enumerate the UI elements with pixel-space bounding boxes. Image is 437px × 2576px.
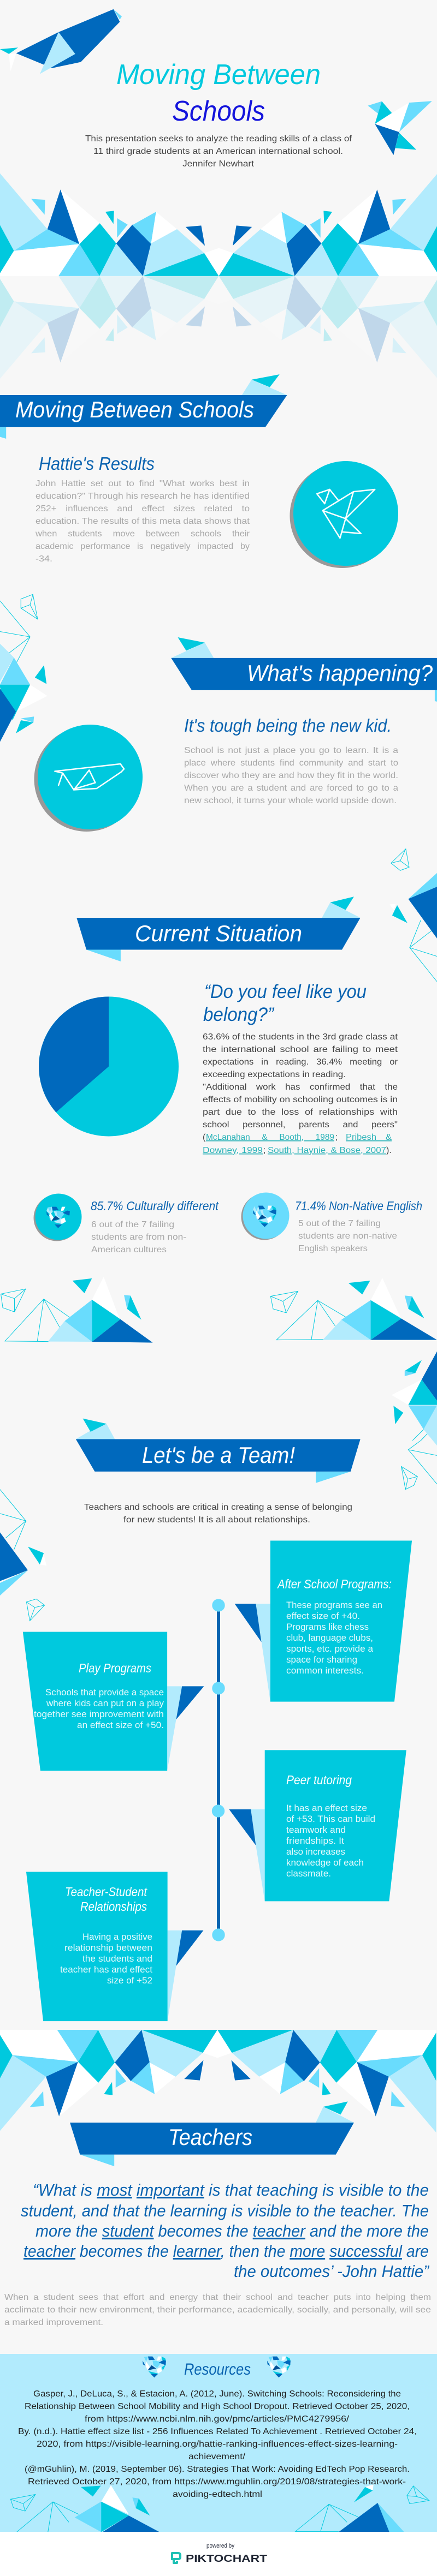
references list: 2020, from https://visible-learning.org/hattie-ranking-influences-effect-sizes-learning- <box>37 2440 398 2449</box>
banner: Current Situation: Current Situation <box>135 921 302 946</box>
title <box>116 59 321 127</box>
references list: Retrieved October 27, 2020, from https://www.mguhlin.org/2019/08/strategies-that-work- <box>28 2477 406 2487</box>
card: Peer tutoring: also increases <box>286 1847 345 1857</box>
card: After School Programs: sports, etc. provide a <box>286 1644 374 1654</box>
banner: What's happening?: What's happening? <box>247 660 433 686</box>
quote: John Hattie: the outcomes’ -John Hattie” <box>234 2262 430 2281</box>
crystal band with reflection <box>0 174 437 379</box>
decorative crystal right <box>389 849 437 982</box>
banner: Teachers: Teachers <box>168 2124 252 2150</box>
card: After School Programs: Programs like chess <box>286 1622 369 1632</box>
references list: (@mGuhlin), M. (2019, September 06). Strategies That Work: Avoiding EdTech Pop Research. <box>25 2465 410 2474</box>
references list: from https://www.ncbi.nlm.nih.gov/pmc/articles/PMC4279956/ <box>85 2414 350 2424</box>
stat: non-native English: 5 out of the 7 failing <box>298 1219 381 1228</box>
card: Teacher-Student Relationships: Having a positive <box>82 1932 152 1942</box>
crystal band inverted <box>0 2030 436 2132</box>
stat: culturally different <box>34 1194 219 1254</box>
card: Play Programs: where kids can put on a play <box>46 1699 164 1708</box>
card: Play Programs: Schools that provide a space <box>45 1688 164 1698</box>
card: Peer tutoring: friendships. It <box>286 1836 344 1846</box>
heading: Hattie's Results: Hattie's Results <box>39 453 155 474</box>
text block: belonging statistics: Pribesh & <box>346 1133 392 1142</box>
heading: Do you feel like you belong?: belong?” <box>203 1004 274 1025</box>
intro text: This presentation seeks to analyze the reading skills of a class of <box>85 134 352 144</box>
heading: Resources with heart icons: Resources <box>184 2360 251 2378</box>
text block: belonging statistics: effects of mobility on schooling outcomes is in <box>203 1095 398 1104</box>
heading: Do you feel like you belong? <box>203 981 367 1025</box>
stat: culturally different: 6 out of the 7 failing <box>91 1220 174 1229</box>
pie chart <box>39 996 179 1136</box>
mountains left in resources <box>10 2485 160 2532</box>
card: After School Programs: These programs see an <box>286 1600 382 1610</box>
card: Teacher-Student Relationships: the students and <box>82 1954 152 1964</box>
quote: John Hattie: teacher becomes the learner, then the more successful are <box>23 2242 429 2261</box>
banner: Let's be a Team!: Let's be a Team! <box>142 1442 295 1468</box>
stat: culturally different: students are from non- <box>91 1233 186 1242</box>
card: Play Programs: together see improvement with <box>34 1710 164 1719</box>
text block: belonging statistics: ( <box>203 1133 206 1142</box>
text block: new kid: School is not just a place you go to learn. It is a <box>184 746 398 755</box>
card: Peer tutoring: Peer tutoring <box>286 1773 352 1787</box>
text block: new kid: new school, it turns your whole world upside down. <box>184 796 397 805</box>
card: After School Programs: common interests. <box>286 1666 364 1676</box>
text block: belonging statistics: ; <box>335 1133 338 1142</box>
card: Play Programs: Play Programs <box>79 1661 151 1675</box>
decorative crystal left lower <box>0 1490 46 1621</box>
card: After School Programs: space for sharing <box>286 1655 357 1665</box>
banner: Moving Between Schools: Moving Between Schools <box>15 397 254 422</box>
heading: It's tough being the new kid: It's tough being the new kid. <box>184 715 392 736</box>
quote: John Hattie: “What is most important is that teaching is visible to the <box>33 2180 429 2200</box>
text block: Hattie's results: 252+ influences and effect sizes related to <box>36 504 250 513</box>
text block: belonging statistics: South, Haynie, & Bose, 2007 <box>268 1146 386 1155</box>
mountains right <box>270 1278 437 1340</box>
references list <box>18 2389 417 2499</box>
card: Teacher-Student Relationships: Relationships <box>80 1899 147 1914</box>
icon: paper whale in circle <box>34 725 143 832</box>
text block: relationships intro: Teachers and schools are critical in creating a sense of belonging <box>84 1503 352 1512</box>
quote: John Hattie: more the student becomes the teacher and the more the <box>36 2221 429 2240</box>
text block: new kid <box>184 746 398 805</box>
text block: marked improvement <box>4 2293 431 2327</box>
text block: Hattie's results: education. The results of this meta data shows that <box>36 517 250 526</box>
panel: resources <box>0 2354 437 2532</box>
card: Teacher-Student Relationships <box>26 1872 203 2021</box>
title: Moving Between <box>116 59 321 91</box>
text block: marked improvement: When a student sees that effort and energy that their school and teacher puts into helping them <box>4 2293 431 2302</box>
text block: Hattie's results: -34. <box>36 554 52 564</box>
text block: Hattie's results: when students move between schools their <box>35 529 250 539</box>
banner: Moving Between Schools <box>0 374 287 439</box>
text block: belonging statistics <box>203 1032 398 1155</box>
references list: Relationship Between School Mobility and High School Dropout. Retrieved October 25, 2020, <box>25 2402 410 2411</box>
card: After School Programs <box>235 1541 412 1702</box>
card: Teacher-Student Relationships: size of +52 <box>107 1976 152 1986</box>
stat: non-native English: English speakers <box>298 1244 368 1253</box>
banner: What's happening? <box>171 637 437 702</box>
heading: Do you feel like you belong?: “Do you feel like you <box>204 981 367 1002</box>
card: Peer tutoring <box>229 1750 406 1901</box>
mountains right in resources <box>296 2484 429 2532</box>
references list: avoiding-edtech.html <box>173 2490 262 2499</box>
card: Teacher-Student Relationships: Teacher-Student <box>65 1885 147 1899</box>
intro text <box>85 134 352 169</box>
text block: belonging statistics: exceeding expectations in reading. <box>203 1070 346 1079</box>
footer: powered by Piktochart: PIKTOCHART <box>186 2553 267 2564</box>
banner: Teachers <box>70 2101 354 2166</box>
text block: Hattie's results: John Hattie set out to find "What works best in <box>36 479 250 488</box>
text block: marked improvement: acclimate to their new environment, their performance, academically, socially, and personally, will see <box>4 2305 431 2315</box>
stat: culturally different: 85.7% Culturally different <box>91 1199 219 1213</box>
references list: By. (n.d.). Hattie effect size list - 256 Influences Related To Achievement . Retrieved October 24, <box>18 2427 417 2436</box>
text block: Hattie's results <box>35 479 250 564</box>
text block: belonging statistics: "Additional work has confirmed that the <box>203 1083 398 1092</box>
card: After School Programs: effect size of +40. <box>286 1611 360 1621</box>
text block: belonging statistics: school personnel, parents and peers" <box>203 1120 398 1129</box>
icon: heart in cyan circle <box>34 1194 82 1241</box>
card: After School Programs: club, language clubs, <box>286 1633 373 1643</box>
card: Peer tutoring: knowledge of each <box>286 1858 364 1868</box>
intro text: Jennifer Newhart <box>182 159 255 169</box>
text block: belonging statistics: expectations in reading. 36.4% meeting or <box>203 1057 398 1067</box>
text block: belonging statistics: part due to the loss of relationships with <box>203 1108 398 1117</box>
stat: non-native English <box>241 1193 422 1253</box>
card: Play Programs <box>23 1632 204 1771</box>
card: After School Programs: After School Programs: <box>276 1577 392 1591</box>
banner: Current Situation <box>76 896 361 961</box>
quote: John Hattie <box>21 2180 430 2281</box>
decorative crystal left <box>0 594 48 742</box>
stat: non-native English: students are non-native <box>298 1232 397 1241</box>
text block: belonging statistics: McLanahan & Booth, 1989 <box>206 1133 334 1142</box>
intro text: 11 third grade students at an American international school. <box>93 147 343 156</box>
references list: Gasper, J., DeLuca, S., & Estacion, A. (2012, June). Switching Schools: Reconsidering the <box>33 2389 401 2399</box>
card: Play Programs: an effect size of +50. <box>77 1720 164 1730</box>
text block: Hattie's results: education?" Through his research he has identified <box>36 492 250 501</box>
card: Teacher-Student Relationships: teacher has and effect <box>60 1965 152 1975</box>
text block: new kid: When you are a student and are forced to go to a <box>184 784 398 793</box>
text block: belonging statistics: the international school are failing to meet <box>203 1045 398 1054</box>
text block: belonging statistics: ). <box>386 1146 392 1155</box>
icon: Piktochart logo <box>172 2553 180 2563</box>
footer: powered by Piktochart <box>0 2532 437 2576</box>
icon: origami bird top right <box>368 101 432 155</box>
icon: bird in circle <box>290 461 398 568</box>
text block: relationships intro: for new students! It is all about relationships. <box>123 1515 310 1525</box>
heading: Resources with heart icons <box>143 2357 291 2378</box>
text block: belonging statistics: 63.6% of the students in the 3rd grade class at <box>203 1032 398 1042</box>
text block: relationships intro <box>84 1503 352 1525</box>
icon: origami whale top left <box>0 9 122 74</box>
card: Peer tutoring: It has an effect size <box>286 1803 367 1813</box>
text block: belonging statistics: ; <box>263 1146 265 1155</box>
text block: marked improvement: a marked improvement. <box>4 2318 103 2327</box>
decorative crystal right lower <box>392 1352 437 1490</box>
text block: belonging statistics: Downey, 1999 <box>203 1146 263 1155</box>
card: Peer tutoring: classmate. <box>286 1869 331 1879</box>
card: Teacher-Student Relationships: relationship between <box>64 1943 152 1953</box>
icon: heart in light blue circle <box>241 1193 290 1240</box>
text block: new kid: place where students find community and start to <box>184 758 398 768</box>
text block: new kid: discover who they are and how they fit in the world. <box>184 771 398 780</box>
footer: powered by Piktochart: powered by <box>206 2543 234 2549</box>
reflection <box>0 276 437 379</box>
title: Schools <box>172 95 265 127</box>
mountains left <box>1 1277 153 1343</box>
timeline <box>212 1599 225 1941</box>
card: Peer tutoring: of +53. This can build <box>286 1814 375 1824</box>
references list: achievement/ <box>188 2452 246 2461</box>
stat: culturally different: American cultures <box>91 1245 167 1254</box>
text block: Hattie's results: academic performance is negatively impacted by <box>36 542 250 551</box>
card: Peer tutoring: teamwork and <box>286 1825 346 1835</box>
timeline nodes <box>212 1599 225 1941</box>
banner: Let's be a Team! <box>76 1419 361 1483</box>
